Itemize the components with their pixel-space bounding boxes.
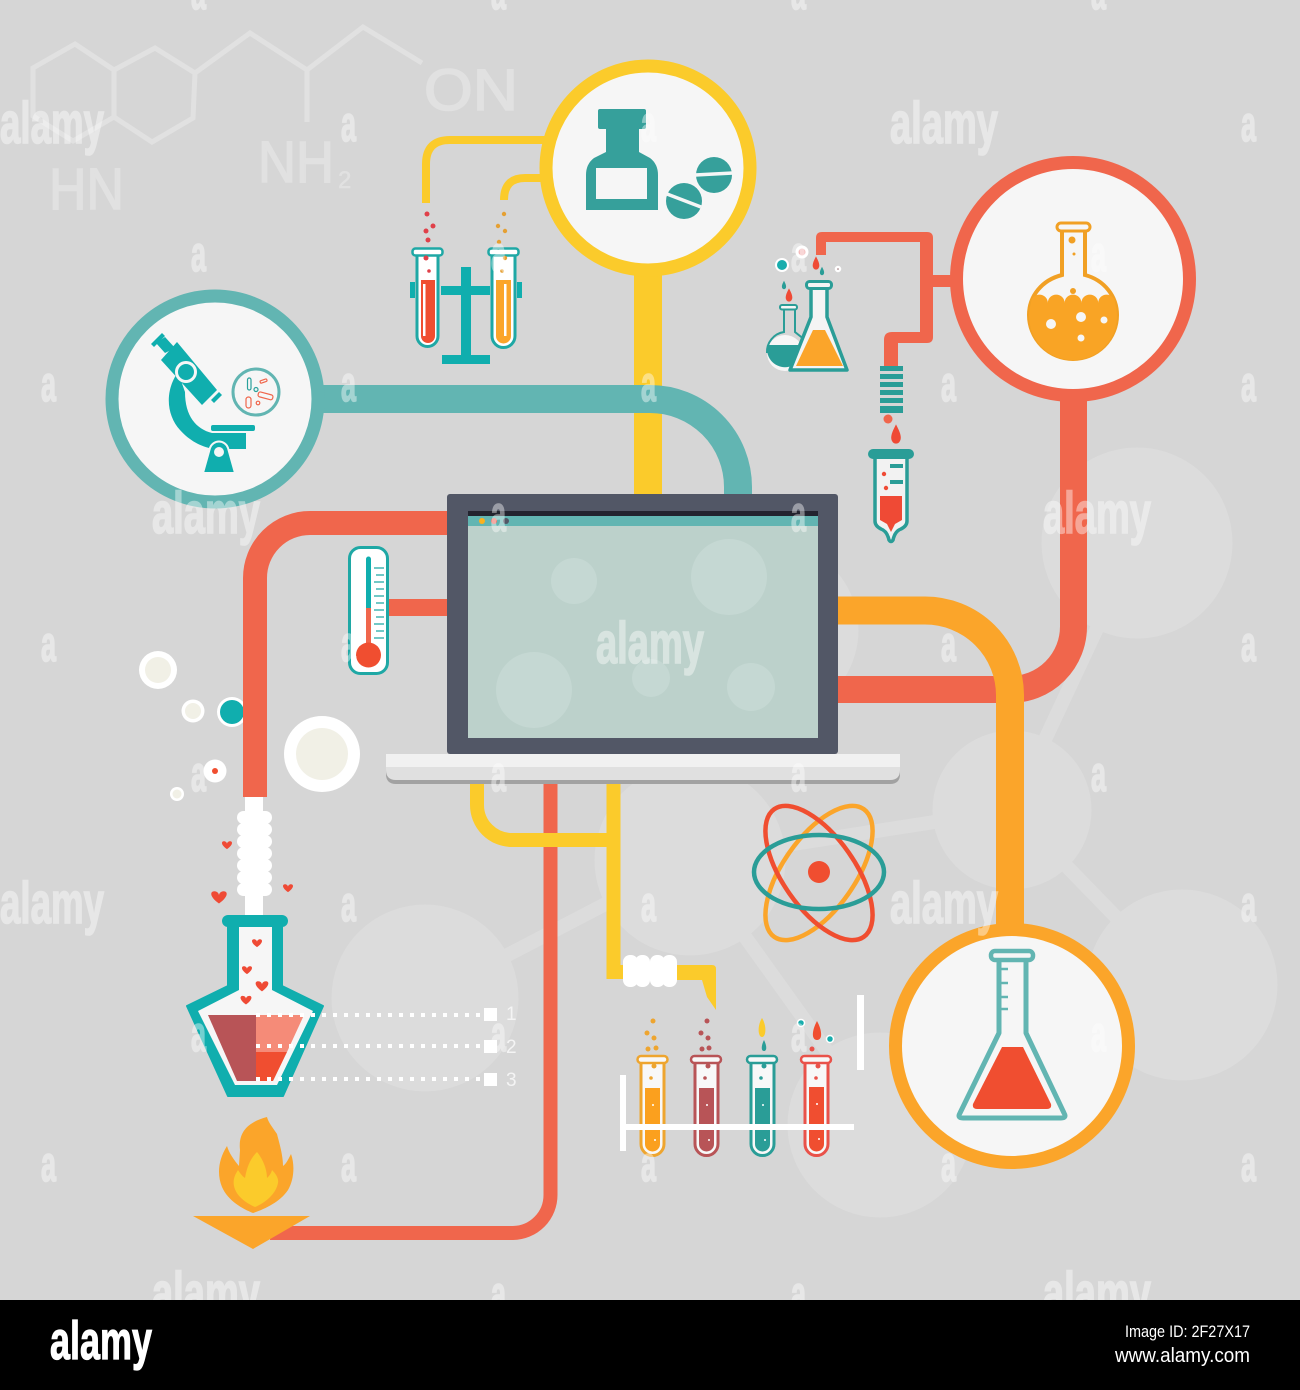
footer bar bbox=[0, 1300, 1300, 1390]
watermark: a bbox=[191, 746, 207, 802]
watermark: a bbox=[1241, 1136, 1257, 1192]
watermark: a bbox=[791, 1266, 807, 1322]
watermark: a bbox=[491, 1006, 507, 1062]
tube: maroon bbox=[691, 1056, 721, 1156]
icon: conical flask bbox=[959, 951, 1065, 1118]
pipe: yellow to laptop bbox=[634, 270, 662, 496]
icon: pills bbox=[666, 157, 733, 219]
pipe: yellow bottom bbox=[477, 782, 630, 972]
icon: coil bbox=[880, 366, 903, 413]
watermark: a bbox=[1091, 746, 1107, 802]
footer bar: alamy bbox=[50, 1311, 152, 1371]
watermark: alamy bbox=[596, 611, 704, 676]
legend with dotted leaders bbox=[256, 1004, 517, 1091]
icon: atom bbox=[745, 788, 893, 958]
watermark: a bbox=[491, 226, 507, 282]
icon: thermometer bbox=[350, 548, 388, 674]
icon: balance with tubes bbox=[410, 212, 522, 364]
icon: yellow coil bbox=[623, 955, 677, 987]
watermark: alamy bbox=[152, 481, 260, 546]
chemical formula bbox=[33, 27, 518, 222]
watermark: a bbox=[791, 746, 807, 802]
tube: orange bbox=[638, 1056, 668, 1156]
pipe: orange right bbox=[836, 610, 1010, 935]
watermark: a bbox=[1091, 226, 1107, 282]
watermark: a bbox=[341, 96, 357, 152]
bubbles bbox=[139, 651, 360, 801]
circle: microscope bbox=[112, 296, 318, 502]
hearts bbox=[211, 841, 293, 1005]
watermark: a bbox=[941, 356, 957, 412]
screen bubbles bbox=[496, 539, 775, 728]
icon: microscope bbox=[151, 333, 255, 473]
pipe: red bottom bbox=[270, 782, 550, 1233]
icon: petri dish bbox=[233, 369, 279, 415]
watermark: a bbox=[341, 356, 357, 412]
watermark: a bbox=[41, 1136, 57, 1192]
legend with dotted leaders: 1 bbox=[506, 1004, 517, 1025]
watermark: alamy bbox=[890, 91, 998, 156]
watermark: a bbox=[1241, 876, 1257, 932]
pipe: yellow spout bbox=[670, 965, 716, 1010]
background molecule bbox=[332, 448, 1277, 1217]
watermark: alamy bbox=[152, 1261, 260, 1326]
watermark: a bbox=[641, 356, 657, 412]
watermark: a bbox=[1241, 616, 1257, 672]
icon: round flask bbox=[1029, 223, 1117, 360]
icon: potion flask bbox=[187, 915, 323, 1096]
watermark: a bbox=[191, 226, 207, 282]
footer bar: Image ID: 2F27X17 bbox=[1125, 1322, 1250, 1341]
watermark: a bbox=[791, 226, 807, 282]
watermark: a bbox=[491, 746, 507, 802]
circle: medicine bbox=[546, 66, 750, 270]
tube: red bbox=[801, 1056, 831, 1156]
watermark: a bbox=[791, 1006, 807, 1062]
watermark: a bbox=[1091, 1006, 1107, 1062]
test tube rack bbox=[620, 995, 864, 1156]
footer bar: www.alamy.com bbox=[1114, 1345, 1250, 1367]
watermark: a bbox=[1241, 96, 1257, 152]
watermark: a bbox=[641, 1136, 657, 1192]
legend with dotted leaders: 2 bbox=[506, 1037, 517, 1058]
circle: conical flask bbox=[896, 930, 1128, 1162]
watermark: a bbox=[341, 616, 357, 672]
watermark: a bbox=[341, 876, 357, 932]
chemical formula: ON bbox=[424, 58, 518, 123]
watermark: alamy bbox=[1043, 481, 1151, 546]
watermark: a bbox=[941, 1136, 957, 1192]
tube bubbles bbox=[644, 1018, 834, 1141]
watermark: a bbox=[191, 1006, 207, 1062]
watermark: a bbox=[641, 96, 657, 152]
watermark: a bbox=[41, 356, 57, 412]
watermark: a bbox=[491, 486, 507, 542]
tube: teal bbox=[747, 1056, 777, 1156]
icon: flame bbox=[219, 1117, 293, 1213]
chemical formula: HN bbox=[49, 157, 124, 222]
chemical formula: NH bbox=[258, 130, 334, 195]
rack bars bbox=[620, 995, 864, 1151]
icon: flasks bbox=[767, 247, 847, 371]
circle: round flask bbox=[956, 162, 1190, 396]
watermark: alamy bbox=[0, 871, 104, 936]
pipe: teal to laptop bbox=[320, 399, 738, 496]
watermark: a bbox=[341, 1136, 357, 1192]
watermark: a bbox=[491, 1266, 507, 1322]
icon: bottle bbox=[586, 109, 658, 210]
watermark: a bbox=[641, 876, 657, 932]
pipe: red left bbox=[255, 523, 448, 797]
watermark: alamy bbox=[0, 91, 104, 156]
watermark: a bbox=[941, 616, 957, 672]
watermark: a bbox=[1241, 356, 1257, 412]
watermark: a bbox=[791, 486, 807, 542]
watermark: alamy bbox=[1043, 1261, 1151, 1326]
watermark: alamy bbox=[890, 871, 998, 936]
tubes drip pipes bbox=[426, 140, 545, 203]
pipe: thermometer connector bbox=[385, 599, 448, 616]
watermark: a bbox=[41, 616, 57, 672]
icon: burner bbox=[193, 1216, 310, 1249]
laptop base bbox=[386, 754, 900, 784]
icon: pointed test tube bbox=[868, 414, 914, 542]
icon: white coil bbox=[237, 797, 272, 915]
pipe: red distillation bbox=[816, 232, 955, 366]
legend with dotted leaders: 3 bbox=[506, 1070, 517, 1091]
pipe: red right bbox=[836, 395, 1074, 690]
chemical formula: 2 bbox=[338, 167, 351, 194]
laptop bbox=[386, 494, 900, 784]
